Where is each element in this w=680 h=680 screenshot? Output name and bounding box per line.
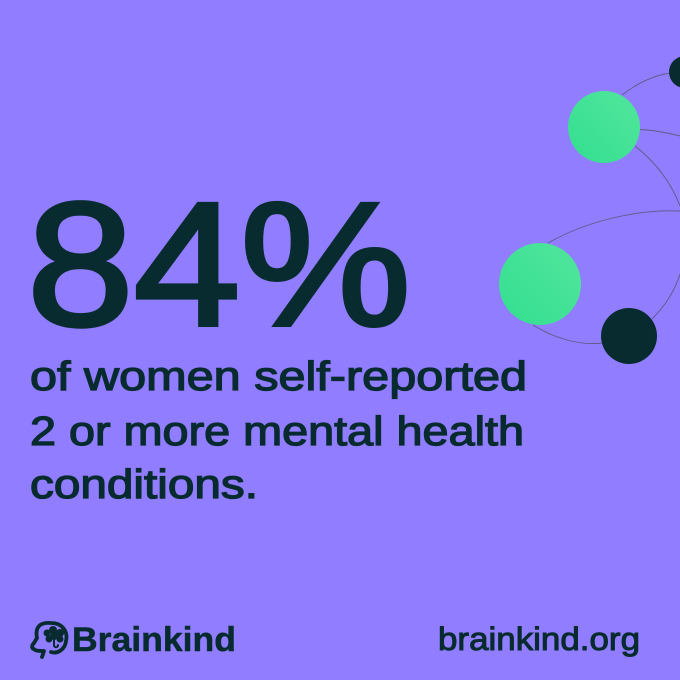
upper green node (568, 91, 640, 163)
upper dark node (669, 56, 680, 88)
lower dark node (601, 308, 657, 364)
icon: head with brain (32, 623, 66, 657)
headline statistic: 84% (27, 167, 411, 363)
supporting statement (30, 353, 527, 507)
network graphic (499, 56, 680, 364)
lower green node (499, 243, 581, 325)
website address: brainkind.org (438, 621, 640, 657)
supporting statement: 2 or more mental health (30, 408, 524, 454)
supporting statement: of women self-reported (30, 353, 527, 399)
brand logo (32, 621, 236, 659)
connecting lines (533, 73, 680, 344)
supporting statement: conditions. (30, 461, 258, 507)
wordmark: Brainkind (72, 621, 236, 659)
